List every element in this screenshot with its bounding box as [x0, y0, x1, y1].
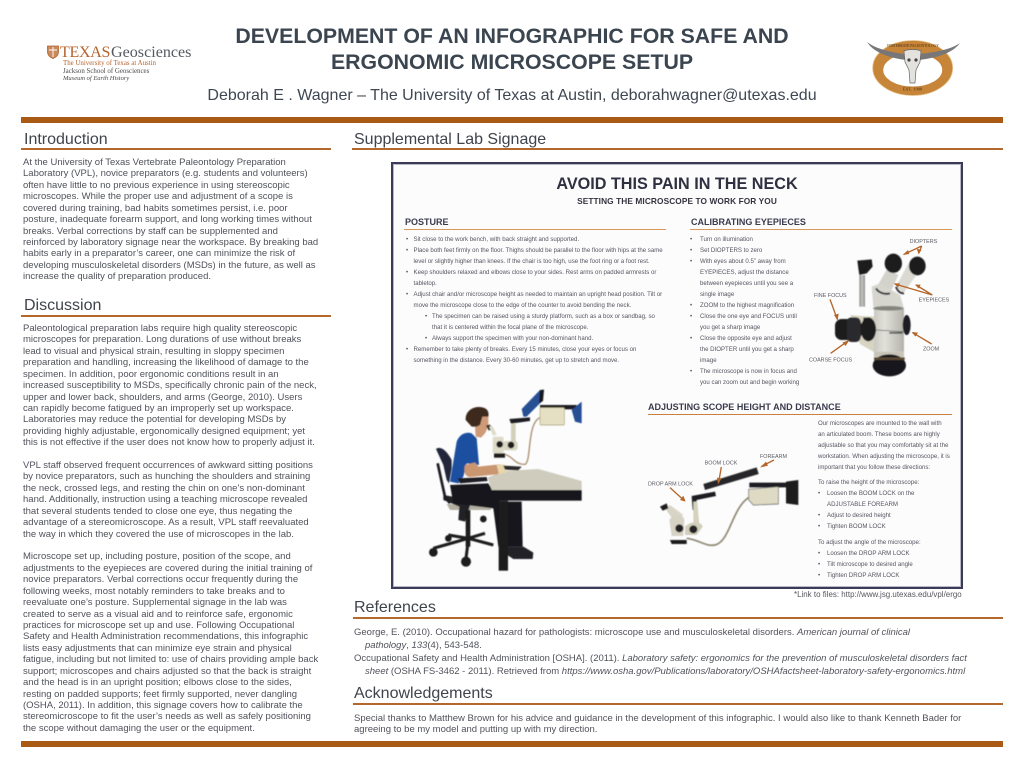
text: adjusting directions: Tilt microscope to desired angle — [827, 561, 913, 568]
text: acknowledgements body: Special thanks to Matthew Brown for his advice and guidance in the development of this infographic. I would also like to thank Kenneth Bader for — [354, 712, 961, 724]
text: eyepiece bullets: ZOOM to the highest magnification — [700, 302, 794, 309]
text: adjusting directions: • — [818, 572, 820, 579]
text: reference entries: sheet (OSHA FS-3462 - 2011). Retrieved from https://www.osha.gov/Publications/laboratory/OSHAfactsheet-laboratory-safety-ergonomics.html — [365, 666, 965, 676]
heading: calibrating eyepieces: CALIBRATING EYEPIECES — [691, 217, 806, 227]
text: eyepiece bullets — [690, 236, 799, 386]
text: introduction body: At the University of Texas Vertebrate Paleontology Preparation — [23, 157, 286, 168]
section: discussion — [21, 297, 331, 734]
text: posture bullets: something in the distance. Every 30-60 minutes, get up to stretch and move. — [414, 357, 619, 364]
text: eyepiece bullets: The microscope is now in focus and — [700, 368, 797, 375]
text: adjusting directions: Our microscopes are mounted to the wall with — [818, 420, 942, 427]
text: introduction body: increase the quality of preparation produced. — [23, 271, 211, 282]
text: eyepiece bullets: Close the opposite eye and adjust — [700, 335, 792, 342]
text: eyepiece bullets: EYEPIECES, adjust the distance — [700, 269, 789, 276]
logo: Texas Geosciences: The University of Texas at Austin — [63, 60, 156, 66]
text: discussion body: the way in which they covered the use of microscopes in the lab. — [23, 529, 294, 540]
bottom orange bar — [21, 741, 1003, 747]
section: acknowledgements — [353, 685, 1003, 735]
text: introduction body: developing musculoskeletal disorders (MSDs) in the future, as well as — [23, 260, 316, 271]
text: discussion body: practices for microscope set up and use. Following Occupational — [23, 620, 294, 631]
text: eyepiece bullets: With eyes about 0.5” away from — [700, 258, 786, 265]
logo: vertebrate paleontology longhorn skull: EST. 1908 — [903, 86, 923, 92]
illustration: stereo microscope with labels: FINE FOCUS — [814, 293, 847, 299]
illustration: boom arm with labels: BOOM LOCK — [705, 460, 738, 466]
link to files note: *Link to files: http://www.jsg.utexas.edu/vpl/ergo — [794, 590, 962, 599]
text: eyepiece bullets: Set DIOPTERS to zero — [700, 247, 762, 254]
text: adjusting directions: Loosen the BOOM LOCK on the — [827, 490, 914, 497]
panel: adjusting scope height and distance — [648, 402, 952, 579]
heading: references: References — [354, 599, 436, 616]
text: eyepiece bullets: • — [690, 335, 692, 342]
text: introduction body: posture, inadequate forearm support, and long working times without — [23, 214, 312, 225]
text: posture bullets: Place both feet firmly on the floor. Thighs should be parallel to the floor with hips at the same — [414, 247, 663, 254]
text: discussion body: and the head is in an upright position; elbows close to the sides, — [23, 677, 292, 688]
logo: Texas Geosciences: TEXAS — [60, 44, 110, 61]
text: posture bullets: Remember to take plenty of breaks. Every 15 minutes, close your eyes or focus on — [414, 346, 636, 353]
text: adjusting directions: Tighten DROP ARM LOCK — [827, 572, 899, 579]
text: posture bullets: Keep shoulders relaxed and elbows close to your sides. Rest arms on padded armrests or — [414, 269, 656, 276]
text: eyepiece bullets: Turn on illumination — [700, 236, 753, 243]
text: posture bullets: tabletop. — [414, 280, 437, 287]
text: discussion body: (OSHA, 2011). In addition, this signage covers how to calibrate the — [23, 700, 303, 711]
text: discussion body — [23, 323, 318, 734]
text: adjusting directions: Tighten BOOM LOCK — [827, 523, 886, 530]
illustration: boom arm with labels: FOREARM — [760, 454, 787, 460]
text: posture bullets: Always support the specimen with your non-dominant hand. — [432, 335, 593, 342]
text: posture bullets: • — [425, 313, 427, 320]
text: reference entries: George, E. (2010). Occupational hazard for pathologists: microscope use and musculoskeletal disorders. American journal of clinical — [354, 627, 910, 638]
legs and shoe — [450, 483, 533, 559]
logo: Texas Geosciences: Jackson School of Geosciences — [63, 68, 149, 74]
poster subtitle: SETTING THE MICROSCOPE TO WORK FOR YOU — [577, 196, 777, 206]
text: adjusting directions: • — [818, 561, 820, 568]
text: posture bullets: Adjust chair and/or microscope height as needed to maintain an upright head position. Tilt or — [414, 291, 662, 298]
text: acknowledgements body — [354, 712, 962, 735]
text: discussion body: following weeks, most notably reminders to take breaks and to — [23, 586, 285, 597]
text: discussion body: lists easy adjustments that can minimize eye strain and physical — [23, 643, 292, 654]
text: posture bullets: that it is centered within the focal plane of the microscope. — [432, 324, 588, 331]
text: discussion body: can rapidly become fatigued by an improperly set up workspace. — [23, 403, 294, 414]
text: eyepiece bullets: image — [700, 357, 717, 364]
author line: Deborah E . Wagner – The University of Texas at Austin, deborahwagner@utexas.edu — [207, 87, 817, 104]
text: posture bullets: • — [406, 346, 408, 353]
text: discussion body: created to serve as a visual aid and to reinforce safe, ergonomic — [23, 609, 293, 620]
upper body, table, scope and boom — [436, 390, 582, 503]
text: discussion body: increased susceptibility to MSDs, specifically chronic pain of the neck, — [23, 380, 317, 391]
illustration: seated person at microscope workstation — [428, 388, 582, 572]
heading: discussion: Discussion — [24, 297, 101, 314]
text: posture bullets: level or slightly higher than knees. If the chair is too high, use the foot ring or a foot rest. — [414, 258, 650, 265]
text: discussion body: Microscope set up, including posture, position of the scope, and — [23, 551, 291, 562]
title: ERGONOMIC MICROSCOPE SETUP — [331, 50, 693, 74]
panel: lab signage poster — [391, 162, 963, 589]
heading: supplemental lab signage: Supplemental Lab Signage — [354, 131, 546, 148]
text: adjusting directions: Adjust to desired height — [827, 512, 891, 519]
text: discussion body: providing highly adjustable, ergonomically designed equipment; yet — [23, 426, 305, 437]
text: discussion body: lead to visual and physical strain, resulting in sloppy specimen — [23, 346, 284, 357]
text: reference entries — [354, 627, 968, 676]
title: DEVELOPMENT OF AN INFOGRAPHIC FOR SAFE AND — [235, 24, 789, 48]
text: posture bullets: • — [406, 291, 408, 298]
table leg — [499, 501, 508, 571]
text: discussion body: support; microscopes and chairs adjusted so that the back is straight — [23, 666, 311, 677]
text: adjusting directions: workstation. When adjusting the microscope, it is — [818, 453, 950, 460]
text: posture bullets: The specimen can be raised using a sturdy platform, such as a box or sandbag, so — [432, 313, 655, 320]
text: discussion body: Laboratories may reduce the potential for developing MSDs by — [23, 414, 286, 425]
heading: adjusting scope: ADJUSTING SCOPE HEIGHT AND DISTANCE — [648, 402, 841, 412]
text: adjusting directions: To adjust the angle of the microscope: — [818, 539, 921, 546]
text: discussion body: upper and lower back, shoulders, and arms (George, 2010). Users — [23, 392, 302, 403]
text: adjusting directions: • — [818, 523, 820, 530]
illustration: boom arm with labels: DROP ARM LOCK — [648, 481, 693, 487]
text: introduction body — [23, 157, 318, 282]
logo: vertebrate paleontology longhorn skull: VERTEBRATE PALEONTOLOGY — [887, 44, 939, 48]
text: discussion body: VPL staff observed frequent occurrences of awkward sitting positions — [23, 460, 313, 471]
text: eyepiece bullets: • — [690, 258, 692, 265]
text: eyepiece bullets: you can zoom out and begin working — [700, 379, 799, 386]
text: discussion body: Safety and Health Administration recommendations, this infographic — [23, 631, 308, 642]
text: discussion body: preparation and handling, increasing the likelihood of damage to the — [23, 357, 309, 368]
logo: Texas Geosciences: Museum of Earth History — [63, 74, 129, 82]
text: discussion body: stereomicroscope to fit the user’s needs as well as safely positioning — [23, 711, 311, 722]
title — [235, 24, 789, 74]
illustration: boom arm with labels — [648, 454, 800, 547]
text: discussion body: Paleontological preparation labs require high quality stereoscopic — [23, 323, 297, 334]
text: discussion body: resting on padded supports; feet firmly supported, never dangling — [23, 688, 297, 700]
text: adjusting directions: ADJUSTABLE FOREARM — [827, 501, 898, 508]
text: introduction body: habits early in a preparator’s career, one can minimize the risk of — [23, 248, 295, 259]
text: discussion body: microscopes for preparation. Long durations of use without breaks — [23, 334, 301, 345]
chair base and seat — [429, 495, 493, 567]
text: discussion body: the scope without damaging the user or the equipment. — [23, 723, 255, 734]
top orange bar — [21, 117, 1003, 123]
text: posture bullets: • — [425, 335, 427, 342]
section: introduction — [21, 131, 331, 282]
text: adjusting directions: • — [818, 490, 820, 497]
text: reference entries: Occupational Safety and Health Administration [OSHA]. (2011). Laboratory safety: ergonomics for the prevention of musculoskeletal disorders fact — [354, 653, 967, 664]
text: discussion body: hand. Additionally, instruction using a teaching microscope revealed — [23, 494, 307, 505]
heading: acknowledgements: Acknowledgements — [354, 685, 493, 702]
text: reference entries: pathology, 133(4), 543-548. — [365, 640, 482, 650]
text: adjusting directions: • — [818, 550, 820, 557]
text: eyepiece bullets: • — [690, 302, 692, 309]
text: adjusting directions: important that you follow these directions: — [818, 464, 930, 471]
text: posture bullets: • — [406, 247, 408, 254]
text: adjusting directions — [818, 420, 950, 579]
text: adjusting directions: Loosen the DROP ARM LOCK — [827, 550, 910, 557]
text: posture bullets: Sit close to the work bench, with back straight and supported. — [414, 236, 579, 243]
panel: posture — [404, 217, 666, 364]
text: eyepiece bullets: • — [690, 236, 692, 243]
text: introduction body: often have little to no previous experience in using stereoscopic — [23, 180, 290, 191]
text: discussion body: that several students tended to close one eye, thus negating the — [23, 506, 292, 517]
text: discussion body: advantage of a stereomicroscope. As a result, VPL staff reevaluated — [23, 517, 309, 528]
text: discussion body: adjustments to the eyepieces are covered during the initial training of — [23, 563, 312, 574]
text: eyepiece bullets: you get a sharp image — [700, 324, 760, 331]
text: adjusting directions: adjustable so that you may comfortably sit at the — [818, 442, 948, 449]
text: eyepiece bullets: the DIOPTER until you get a sharp — [700, 346, 794, 353]
text: posture bullets: • — [406, 269, 408, 276]
text: adjusting directions: To raise the height of the microscope: — [818, 479, 919, 486]
section: references — [353, 599, 1003, 676]
text: introduction body: Laboratory (VPL), novice preparators (e.g. students and volunteers) — [23, 168, 308, 179]
illustration: stereo microscope with labels: COARSE FOCUS — [809, 358, 853, 364]
illustration: stereo microscope with labels: ZOOM — [923, 346, 940, 352]
text: eyepiece bullets: • — [690, 247, 692, 254]
text: discussion body: fatigue, including but not limited to: use of chairs providing ample back — [23, 654, 318, 665]
heading: posture: POSTURE — [405, 217, 449, 227]
illustration: stereo microscope with labels — [809, 239, 950, 378]
poster title: AVOID THIS PAIN IN THE NECK — [556, 174, 798, 192]
text: eyepiece bullets: single image — [700, 291, 734, 298]
logo: vertebrate paleontology longhorn skull — [867, 40, 960, 96]
text: adjusting directions: • — [818, 512, 820, 519]
panel: calibrating eyepieces — [690, 217, 952, 386]
text: introduction body: breaks. Verbal corrections by staff can be supplemented and — [23, 226, 278, 237]
text: posture bullets: move the microscope close to the edge of the counter to avoid bending the neck. — [414, 302, 631, 309]
text: eyepiece bullets: between eyepieces until you see a — [700, 280, 793, 287]
text: discussion body: reevaluate one’s posture. Supplemental signage in the lab was — [23, 597, 287, 608]
text: discussion body: the neck, crossed legs, and resting the chin on one’s non-dominant — [23, 483, 305, 494]
text: discussion body: specimen. In addition, poor ergonomic conditions result in an — [23, 369, 279, 380]
text: discussion body: by novice preparators, such as hunching the shoulders and straining — [23, 471, 310, 482]
text: eyepiece bullets: • — [690, 368, 692, 375]
text: introduction body: covered during training, bad habits sometimes persist, i.e. poor — [23, 203, 288, 214]
text: eyepiece bullets: Close the one eye and FOCUS until — [700, 313, 797, 320]
text: discussion body: novice preparators. Verbal corrections occur frequently during the — [23, 574, 298, 585]
text: adjusting directions: an articulated boom. These booms are highly — [818, 431, 940, 438]
text: posture bullets: • — [406, 236, 408, 243]
text: acknowledgements body: agreeing to be my model and putting up with my direction. — [354, 724, 597, 735]
text: posture bullets — [406, 236, 663, 364]
illustration: stereo microscope with labels: DIOPTERS — [910, 239, 938, 245]
text: discussion body: this is not effective if the user does not know how to properly adjust it. — [23, 437, 315, 448]
text: introduction body: microscopes. While the proper use and adjustment of a scope is — [23, 191, 293, 202]
logo: Texas Geosciences: Geosciences — [111, 44, 191, 61]
text: introduction body: reinforced by laboratory signage near the workspace. By breaking bad — [23, 237, 318, 248]
heading: introduction: Introduction — [24, 131, 108, 148]
logo: Texas Geosciences — [47, 44, 191, 82]
illustration: stereo microscope with labels: EYEPIECES — [919, 297, 950, 303]
text: eyepiece bullets: • — [690, 313, 692, 320]
